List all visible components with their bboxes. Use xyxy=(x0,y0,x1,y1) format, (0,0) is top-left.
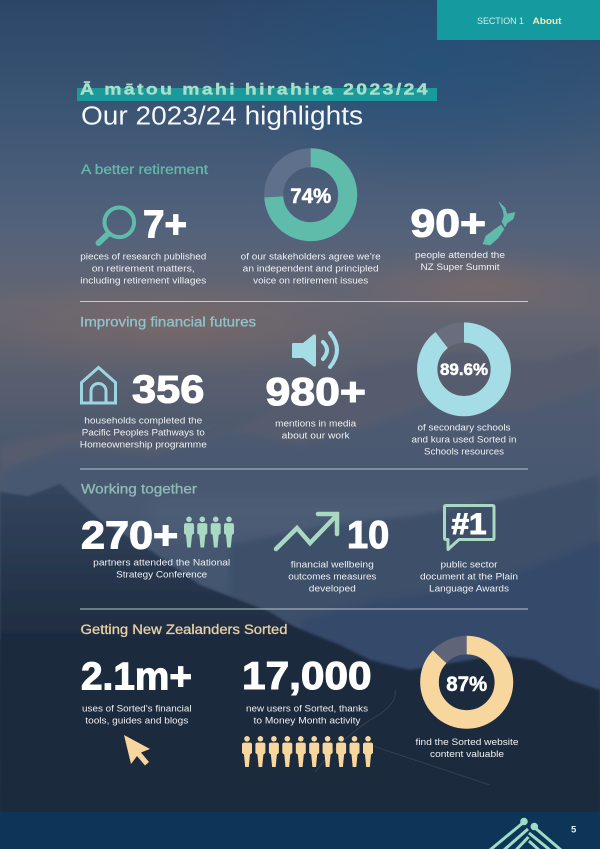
caption: stakeholders: voice on retirement issues xyxy=(253,276,368,286)
section tab xyxy=(437,0,600,40)
heading: Working together xyxy=(81,481,198,496)
caption: website: find the Sorted website xyxy=(416,737,518,748)
footer xyxy=(0,812,600,849)
caption: outcomes: outcomes measures xyxy=(288,572,376,583)
donut chart: 87% xyxy=(430,645,504,720)
caption: plain language xyxy=(420,560,518,595)
section label: SECTION 1 xyxy=(477,16,524,26)
caption: media xyxy=(275,419,357,442)
caption: summit xyxy=(415,250,505,273)
caption: new users: to Money Month activity xyxy=(254,716,361,727)
heading: Improving financial futures xyxy=(80,315,256,330)
caption: schools: and kura used Sorted in xyxy=(412,435,516,446)
icon: ten people xyxy=(242,736,373,767)
caption: research: including retirement villages xyxy=(80,276,207,286)
donut chart: 89.6% xyxy=(427,332,501,406)
donut chart: 87%: 87% xyxy=(446,673,488,696)
donut chart: 74% xyxy=(274,158,348,232)
stat: 90+: 90+ xyxy=(410,203,486,246)
panel: improving financial futures xyxy=(80,315,516,458)
stat: 2.1m+: 2.1m+ xyxy=(81,655,192,698)
icon: cursor xyxy=(124,735,150,766)
section name: About xyxy=(532,16,562,26)
caption: outcomes xyxy=(288,560,376,595)
donut chart: 74%: 74% xyxy=(290,185,332,208)
heading: Getting New Zealanders Sorted xyxy=(80,622,288,637)
page number: 5 xyxy=(571,824,577,836)
caption: households xyxy=(80,415,207,450)
stat: 356: 356 xyxy=(132,368,204,411)
stat: 10: 10 xyxy=(347,514,389,557)
panel: getting New Zealanders sorted xyxy=(80,622,518,767)
caption: partners: partners attended the National xyxy=(93,557,230,568)
caption: research xyxy=(80,252,207,286)
caption: research: pieces of research published xyxy=(80,252,206,262)
stat: 980+: 980+ xyxy=(266,371,366,414)
English title: Our 2023/24 highlights xyxy=(81,102,363,130)
icon: four people xyxy=(184,516,234,548)
caption: plain language: Language Awards xyxy=(429,584,509,595)
caption: households: Pacific Peoples Pathways to xyxy=(82,427,205,438)
caption: outcomes: financial wellbeing xyxy=(291,560,374,571)
caption: media: mentions in media xyxy=(275,419,357,430)
heading: A better retirement xyxy=(81,162,208,177)
title xyxy=(77,80,437,130)
icon: speech bubble #1 xyxy=(444,506,494,550)
Māori title: Ā mātou mahi hirahira 2023/24 xyxy=(80,80,430,98)
caption: schools: Schools resources xyxy=(424,447,504,458)
icon: rising arrow xyxy=(276,514,337,549)
caption: research: on retirement matters, xyxy=(92,264,195,274)
caption: new users: new users of Sorted, thanks xyxy=(246,704,368,715)
caption: households: households completed the xyxy=(84,415,202,426)
caption: stakeholders: of our stakeholders agree we’re xyxy=(241,252,381,262)
stat: 7+: 7+ xyxy=(143,204,187,247)
stat: 270+: 270+ xyxy=(81,515,178,558)
donut chart: 89.6%: 89.6% xyxy=(440,361,488,379)
stat: 17,000: 17,000 xyxy=(242,655,372,698)
caption: website: content valuable xyxy=(430,749,504,760)
caption: households: Homeownership programme xyxy=(80,439,207,450)
caption: plain language: document at the Plain xyxy=(420,572,518,583)
panel: a better retirement xyxy=(80,158,515,286)
caption: uses: tools, guides and blogs xyxy=(85,716,189,727)
icon: Sorted logo xyxy=(490,818,561,849)
caption: new users xyxy=(246,704,368,727)
caption: schools: of secondary schools xyxy=(418,423,511,434)
icon: speaker xyxy=(292,333,337,367)
panel: working together xyxy=(81,481,518,595)
caption: stakeholders: an independent and principled xyxy=(243,264,379,274)
caption: summit: people attended the xyxy=(415,250,505,261)
caption: partners xyxy=(93,557,230,580)
caption: schools xyxy=(412,423,516,458)
icon: speech bubble #1: #1 xyxy=(452,508,486,541)
icon: house xyxy=(82,368,116,403)
caption: uses xyxy=(82,704,192,727)
caption: outcomes: developed xyxy=(309,584,356,595)
caption: plain language: public sector xyxy=(440,560,498,571)
caption: partners: Strategy Conference xyxy=(116,569,207,580)
caption: summit: NZ Super Summit xyxy=(420,262,500,273)
icon: magnifying glass xyxy=(98,208,134,243)
icon: New Zealand map xyxy=(483,202,515,245)
caption: media: about our work xyxy=(282,431,350,442)
caption: website xyxy=(416,737,518,760)
caption: stakeholders xyxy=(241,252,381,286)
caption: uses: uses of Sorted’s financial xyxy=(82,704,192,715)
